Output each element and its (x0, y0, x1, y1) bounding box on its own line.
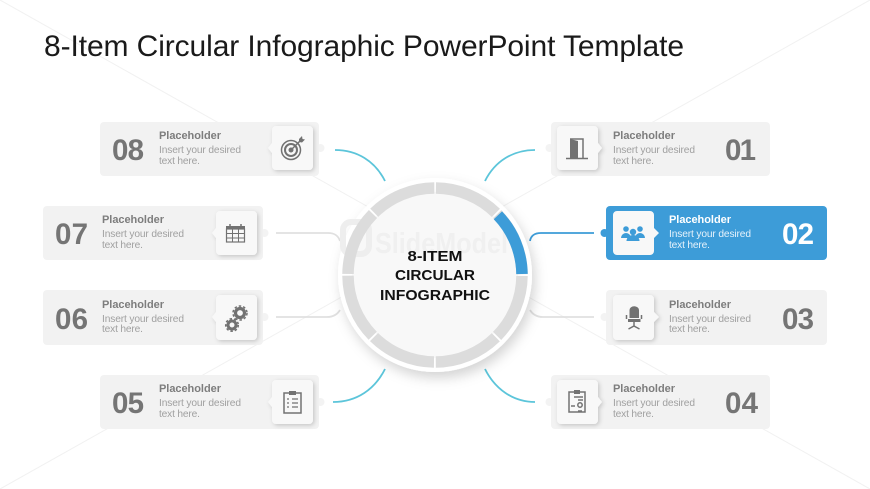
panel: item 07: Insert your desired (102, 229, 184, 240)
panel: item 01: text here. (613, 156, 654, 167)
panel: item 07: text here. (102, 240, 143, 251)
panel: item 08 (100, 122, 324, 176)
icon: target (282, 136, 305, 160)
connector: item 07 (276, 233, 340, 241)
panel: item 02 highlighted: Insert your desired (669, 229, 751, 240)
connector: item 08 (335, 150, 385, 181)
icon: certificate clipboard (569, 390, 585, 412)
connector: item 05 (333, 369, 385, 402)
watermark: SlideModel (375, 228, 508, 260)
panel: item 03: text here. (669, 324, 710, 335)
connector: item 03 (530, 310, 594, 317)
central circle (338, 178, 532, 372)
panel: item 05: 05 (112, 387, 144, 420)
panel: item 06: text here. (102, 324, 143, 335)
icon: door (566, 139, 588, 158)
watermark (343, 222, 508, 260)
panel: item 03 (600, 290, 827, 345)
panel: item 07: Placeholder (102, 214, 165, 226)
segmented ring (348, 188, 522, 362)
centre text (380, 248, 490, 304)
title: 8-Item Circular Infographic PowerPoint Template (44, 30, 684, 63)
panel: item 05: text here. (159, 409, 200, 420)
panel: item 04: Placeholder (613, 383, 676, 395)
panel: item 06: 06 (55, 303, 88, 336)
panel: item 04: text here. (613, 409, 654, 420)
panel: item 08: Insert your desired (159, 145, 241, 156)
panel: item 05 (100, 375, 324, 429)
icon: calendar (226, 224, 245, 242)
panel: item 06: Insert your desired (102, 314, 184, 325)
panel: item 01: Placeholder (613, 130, 676, 142)
panel: item 06: Placeholder (102, 299, 165, 311)
panel: item 03: 03 (782, 303, 814, 336)
panel: item 02 highlighted (600, 206, 827, 260)
panel: item 04 (546, 375, 770, 429)
connector: item 01 (485, 150, 535, 181)
panel: item 07 (43, 206, 268, 260)
panel: item 04: Insert your desired (613, 398, 695, 409)
panel: item 07: 07 (55, 218, 88, 251)
icon: gears (226, 306, 247, 331)
centre text: INFOGRAPHIC (380, 287, 490, 304)
active ring segment (498, 215, 522, 274)
panel: item 08: Placeholder (159, 130, 222, 142)
panel: item 05: Placeholder (159, 383, 222, 395)
panel: item 02 highlighted: 02 (782, 218, 814, 251)
panel: item 06 (43, 290, 268, 345)
connector: item 06 (276, 310, 340, 317)
panel: item 01 (546, 122, 770, 176)
panel: item 01: Insert your desired (613, 145, 695, 156)
panel: item 08: 08 (112, 134, 144, 167)
panel: item 04: 04 (725, 387, 759, 420)
panel: item 03: Placeholder (669, 299, 732, 311)
connector: item 02 (530, 233, 594, 241)
panel: item 02 highlighted: text here. (669, 240, 710, 251)
panel: item 03: Insert your desired (669, 314, 751, 325)
panel: item 08: text here. (159, 156, 200, 167)
connector: item 04 (485, 369, 535, 402)
icon: team (621, 226, 645, 241)
icon: office chair (626, 306, 642, 329)
centre text: 8-ITEM (408, 248, 462, 265)
centre text: CIRCULAR (395, 267, 475, 284)
panel: item 05: Insert your desired (159, 398, 241, 409)
panel: item 01: 01 (725, 134, 756, 167)
icon: checklist (284, 391, 301, 413)
panel: item 02 highlighted: Placeholder (669, 214, 732, 226)
